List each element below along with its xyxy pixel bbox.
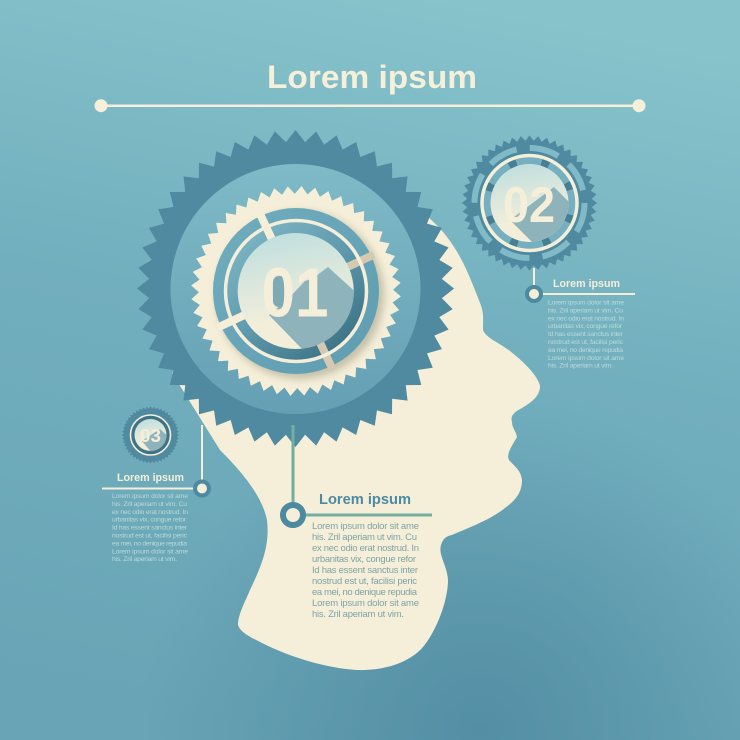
- gear 03: [122, 406, 179, 464]
- callout 03 connector: [102, 425, 202, 488]
- callout 03 body text: Lorem ipsum dolor sit ame: [112, 493, 188, 500]
- gear 01 ring shadow: [216, 211, 384, 379]
- callout 02 heading: Lorem ipsum: [553, 278, 620, 290]
- callout 03 body text: Id has essent sanctus inter: [112, 525, 188, 532]
- callout 03 body text: ea mei, no denique repudia: [112, 540, 187, 547]
- gear 01 face: [238, 233, 354, 349]
- number 01: 01: [262, 254, 328, 332]
- callout 01 body text: Lorem ipsum dolor sit ame: [312, 598, 419, 609]
- callout 03 body text: urbanitas vix, congue refor: [112, 517, 187, 524]
- gear 01 cross cuts: [216, 211, 376, 371]
- callout 03 body text: Lorem ipsum dolor sit ame: [112, 548, 188, 555]
- callout 02 body text: his. Zril aperiam ut vim.: [548, 363, 613, 370]
- gear 02 light band: [474, 148, 584, 258]
- callout 02 body text: his. Zril aperiam ut vim. Cu: [548, 307, 623, 314]
- gear 02: [462, 136, 597, 270]
- callout 01 body text: his. Zril aperiam ut vim.: [312, 609, 404, 620]
- callout 01 body text: [312, 521, 419, 620]
- gear 03 ring: [130, 415, 170, 455]
- callout 01 body text: ea mei, no denique repudia: [312, 587, 418, 598]
- callout 03 heading: Lorem ipsum: [117, 472, 184, 484]
- callout 01 body text: Lorem ipsum dolor sit ame: [312, 521, 419, 532]
- callout 02 body text: urbanitas vix, congue refor: [548, 323, 623, 330]
- title rule with end dots: [94, 99, 646, 112]
- head silhouette: [172, 217, 540, 670]
- callout 01 body text: nostrud est ut, facilisi peric: [312, 576, 417, 587]
- callout 01 body text: ex nec odio erat nostrud. In: [312, 543, 419, 554]
- gear 03 long shadow: [142, 429, 166, 451]
- callout 02 body text: nostrud est ut, facilisi peric: [548, 339, 624, 346]
- callout 02 body text: ex nec odio erat nostrud. In: [548, 315, 624, 322]
- callout 02 body text: Id has essent sanctus inter: [548, 331, 624, 338]
- callout 03 body text: [112, 493, 188, 563]
- callout 02 body text: [548, 300, 624, 370]
- gear 01 segmented band: [213, 208, 379, 374]
- number 02: 02: [503, 177, 555, 233]
- callout 02 node: [527, 287, 541, 301]
- gear 01 thin ring: [226, 220, 366, 362]
- gear 02 long shadow: [512, 187, 568, 242]
- gear 01 cream teeth: [186, 181, 406, 401]
- gear 01 inner well: [225, 220, 367, 362]
- gear 02 ring: [482, 156, 577, 250]
- callout 01 body text: his. Zril aperiam ut vim. Cu: [312, 532, 417, 543]
- gear 03 face: [134, 419, 166, 451]
- callout 02 connector: [534, 268, 635, 294]
- gear 02 dark blocks: [486, 160, 572, 246]
- callout 01 body text: Id has essent sanctus inter: [312, 565, 418, 576]
- callout 02: [527, 268, 635, 370]
- gear 02 face: [490, 164, 568, 242]
- gear 03 well: [130, 415, 170, 455]
- callout 01 body text: urbanitas vix, congue refor: [312, 554, 416, 565]
- callout 03 body text: his. Zril aperiam ut vim.: [112, 556, 177, 563]
- gear 01 long shadow: [269, 267, 354, 349]
- callout 01 connector: [293, 425, 432, 515]
- gear 02 teeth: [462, 136, 597, 270]
- gear 03 teeth: [122, 406, 179, 464]
- gear 02 well: [482, 156, 576, 250]
- callout 02 body text: Lorem ipsum dolor sit ame: [548, 300, 624, 306]
- number 03: 03: [140, 426, 161, 446]
- title: Lorem ipsum: [267, 59, 477, 95]
- callout 02 body text: ea mei, no denique repudia: [548, 347, 623, 354]
- callout 02 body text: Lorem ipsum dolor sit ame: [548, 355, 624, 362]
- callout 03: [102, 425, 209, 563]
- callout 03 body text: ex nec odio erat nostrud. In: [112, 509, 188, 516]
- callout 01 node: [283, 505, 303, 525]
- callout 01: [283, 425, 432, 620]
- callout 01 heading: Lorem ipsum: [319, 491, 411, 508]
- callout 03 node: [195, 482, 209, 496]
- gear 01 outer teeth: [137, 130, 454, 447]
- callout 03 body text: his. Zril aperiam ut vim. Cu: [112, 501, 187, 508]
- gear 01 blue disc: [170, 164, 420, 414]
- gear 01: [137, 130, 454, 447]
- callout 03 body text: nostrud est ut, facilisi peric: [112, 532, 188, 540]
